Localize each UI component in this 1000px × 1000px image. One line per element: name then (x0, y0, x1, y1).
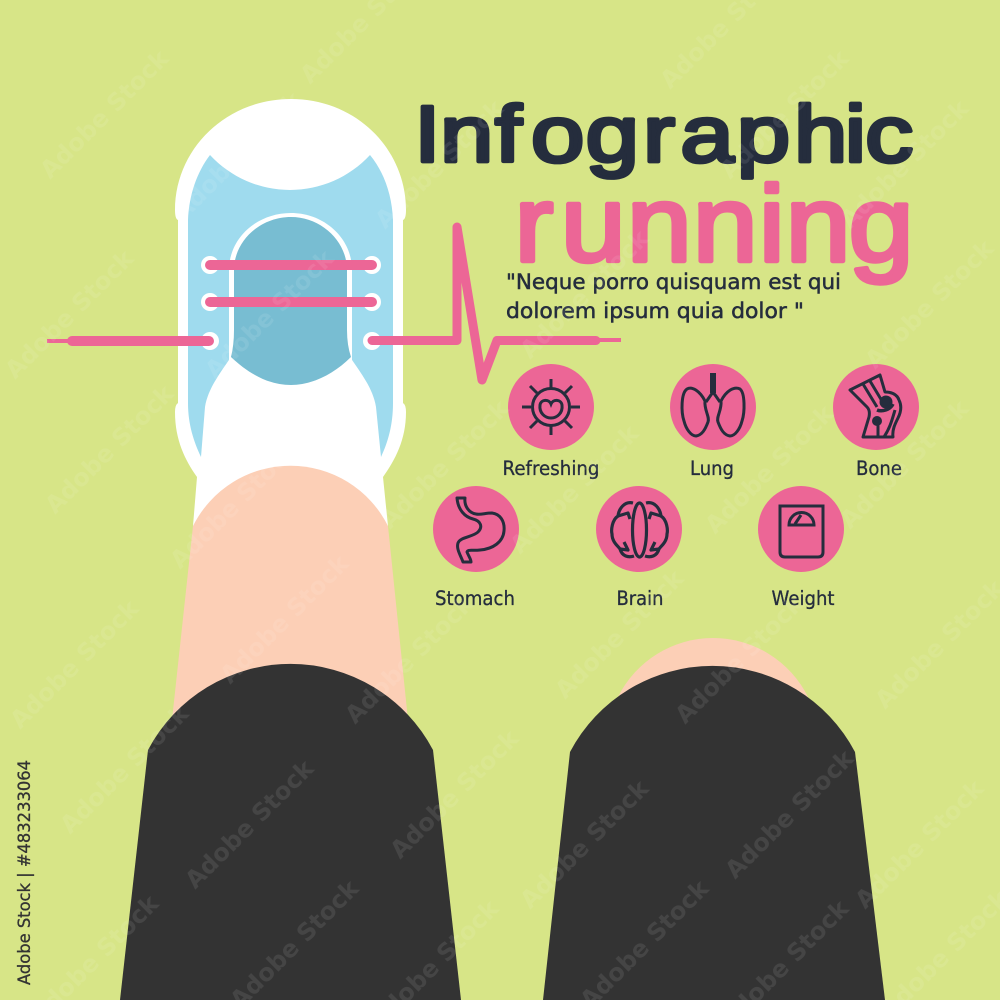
icon labels: Refreshing (502, 457, 600, 480)
watermark: Adobe Stock (835, 394, 975, 534)
shoe (175, 99, 406, 526)
watermark: Adobe Stock (370, 94, 510, 234)
right shorts (543, 666, 885, 1000)
left lace tip (47, 339, 70, 343)
watermark: Adobe Stock (850, 774, 990, 914)
quote text (506, 270, 841, 323)
left leg skin (172, 466, 408, 720)
icon: brain (596, 486, 682, 572)
icon: lung (670, 364, 756, 450)
title: Infographic (414, 89, 913, 179)
watermark: Adobe Stock (340, 589, 480, 729)
quote text: dolorem ipsum quia dolor " (506, 299, 804, 323)
icon labels: Bone (856, 457, 902, 480)
icon labels: Stomach (435, 587, 515, 610)
quote text: "Neque porro quisquam est qui (506, 270, 841, 294)
shoe white outer sole (175, 99, 406, 526)
subtitle running: running (514, 163, 914, 284)
icon labels: Lung (690, 457, 734, 480)
watermark: Adobe Stock (505, 419, 645, 559)
watermark: Adobe Stock (375, 394, 515, 534)
watermark: Adobe Stock (715, 44, 855, 184)
watermark: Adobe Stock (720, 744, 860, 884)
watermark: Adobe Stock (835, 94, 975, 234)
watermark: Adobe Stock (670, 589, 810, 729)
eyelets (201, 256, 381, 350)
heartbeat lace line (372, 227, 621, 380)
watermark: Adobe Stock (165, 434, 305, 574)
right leg skin (618, 638, 808, 720)
icon: refreshing sun (508, 364, 594, 450)
watermark: Adobe Stock (180, 754, 320, 894)
watermark: Adobe Stock (40, 379, 180, 519)
vertical stock id: Adobe Stock | #483233064 (15, 760, 35, 985)
watermark: Adobe Stock (515, 774, 655, 914)
laces (72, 265, 372, 341)
watermark: Adobe Stock (860, 234, 1000, 374)
icon: stomach (433, 486, 519, 572)
icon labels (435, 457, 902, 610)
watermark: Adobe Stock (515, 224, 655, 364)
watermark: Adobe Stock (168, 86, 308, 226)
watermark: Adobe Stock (200, 244, 340, 384)
shoe blue upper (188, 155, 393, 457)
icon: bone knee (833, 364, 919, 450)
icon labels: Weight (772, 587, 835, 610)
watermark: Adobe Stock (35, 44, 175, 184)
icon: weight scale (758, 486, 844, 572)
watermark: Adobe Stock (5, 594, 145, 734)
watermark: Adobe Stock (385, 724, 525, 864)
watermark: Adobe Stock (215, 549, 355, 689)
icon labels: Brain (616, 587, 664, 610)
watermark: Adobe Stock (0, 244, 140, 384)
left shorts (120, 664, 461, 1000)
watermark: Adobe Stock (550, 564, 690, 704)
shoe tongue (229, 213, 352, 395)
watermark: Adobe Stock (55, 699, 195, 839)
watermark: Adobe Stock (700, 399, 840, 539)
